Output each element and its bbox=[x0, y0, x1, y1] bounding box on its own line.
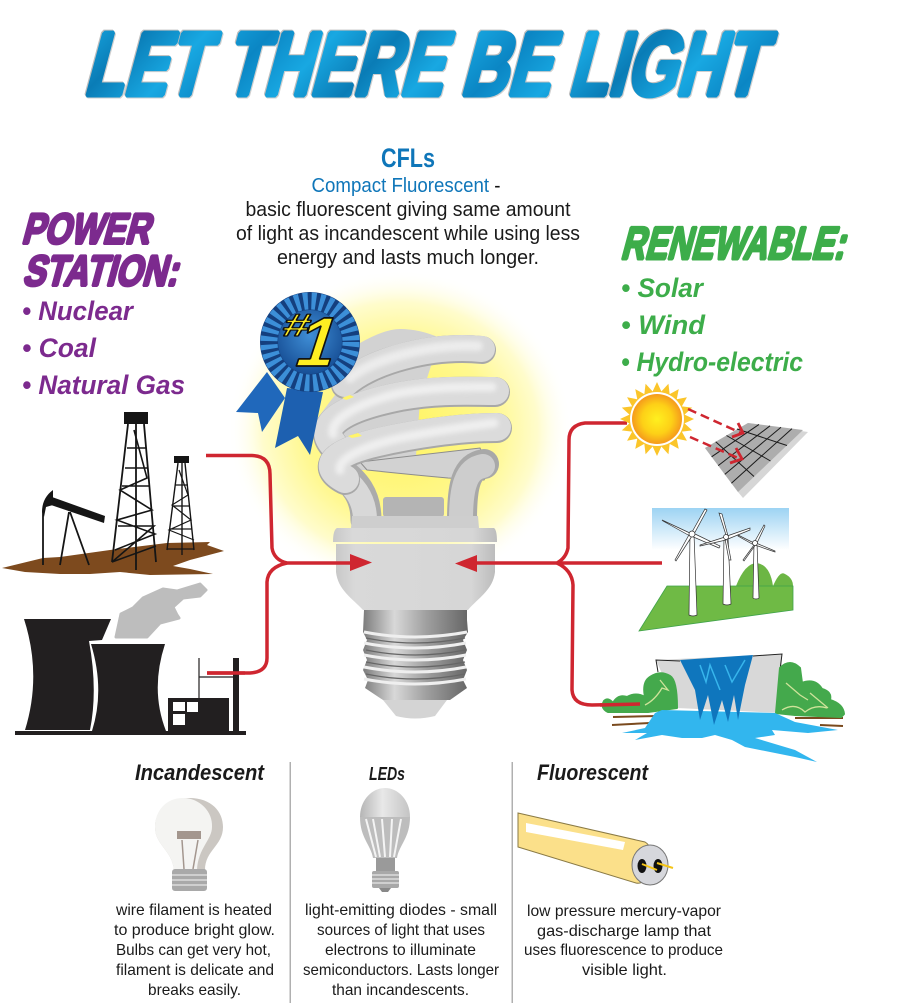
bulb: tip bbox=[383, 700, 447, 718]
icon: fluorescent tube bbox=[518, 813, 673, 885]
bulb: housing bbox=[336, 544, 495, 610]
seal bbox=[278, 310, 342, 374]
description: low pressure mercury-vapor bbox=[527, 903, 722, 920]
cliff edge bbox=[656, 654, 782, 672]
icon: #1 ribbon bbox=[236, 292, 360, 455]
bulb: spiral tube bbox=[328, 346, 497, 480]
sky bbox=[652, 508, 789, 550]
CFLs text line 1: basic fluorescent giving same amount bbox=[246, 199, 571, 221]
description: Bulbs can get very hot, bbox=[116, 942, 271, 959]
tall derrick bbox=[112, 412, 156, 570]
logs bbox=[612, 716, 843, 726]
connector lines: renewable bbox=[477, 423, 662, 705]
bulb glow bbox=[228, 270, 572, 590]
panel dividers bbox=[290, 762, 513, 1003]
heading: Fluorescent bbox=[537, 760, 649, 785]
cooling tower left bbox=[24, 619, 111, 730]
icon: LED bulb bbox=[360, 788, 410, 892]
icon: oil field bbox=[2, 412, 224, 575]
plant ground bbox=[15, 731, 246, 735]
icon: hydro-electric waterfall bbox=[603, 654, 844, 762]
description: breaks easily. bbox=[148, 982, 241, 999]
icon: incandescent bulb bbox=[155, 798, 223, 891]
panel: fluorescent bbox=[518, 760, 723, 979]
bulb: collar bbox=[333, 528, 497, 542]
bushes left bbox=[603, 673, 677, 712]
sun rays to panel bbox=[688, 409, 743, 463]
smoke bbox=[116, 584, 206, 637]
item: wind: • Wind bbox=[621, 310, 706, 340]
bushes right bbox=[776, 663, 844, 717]
connector arrow: left bbox=[350, 554, 372, 571]
description: semiconductors. Lasts longer bbox=[303, 962, 500, 979]
turbines bbox=[662, 509, 775, 616]
bulb: centre tab bbox=[383, 497, 444, 517]
building windows bbox=[173, 702, 198, 725]
ribbon tail right bbox=[275, 388, 323, 455]
sun disc bbox=[630, 392, 684, 446]
rosette bbox=[260, 292, 360, 392]
cliff bbox=[656, 654, 782, 713]
connector arrow: right bbox=[455, 555, 477, 572]
description: wire filament is heated bbox=[115, 902, 272, 919]
power station list bbox=[18, 205, 187, 400]
icon: wind farm bbox=[639, 508, 793, 631]
bulb: back silhouette bbox=[316, 329, 440, 470]
ribbon number: 1 bbox=[287, 304, 350, 382]
bulb: screw base bbox=[363, 610, 468, 700]
item: nuclear: • Nuclear bbox=[22, 296, 134, 326]
panel: incandescent bbox=[114, 760, 275, 999]
connector lines: power station bbox=[206, 456, 352, 673]
plant building bbox=[168, 698, 229, 732]
description: electrons to illuminate bbox=[325, 942, 476, 959]
bulb: small yellow gaps in spiral bbox=[342, 395, 362, 438]
bulb: under tube bbox=[360, 448, 490, 480]
renewable list bbox=[617, 218, 855, 377]
hills bbox=[736, 563, 793, 586]
item: solar: • Solar bbox=[621, 273, 704, 303]
CFLs text line 3: energy and lasts much longer. bbox=[277, 247, 539, 269]
small derrick bbox=[167, 456, 194, 555]
bulb: legs bbox=[338, 464, 484, 520]
pool bbox=[622, 710, 838, 762]
bulb: upper collar bbox=[351, 516, 479, 528]
description: than incandescents. bbox=[332, 982, 469, 999]
CFLs description bbox=[236, 143, 580, 269]
solar panel bbox=[705, 423, 808, 498]
icon: nuclear plant bbox=[15, 584, 246, 735]
description bbox=[303, 902, 500, 999]
panel: LEDs bbox=[303, 764, 500, 999]
cooling tower right bbox=[91, 644, 166, 731]
oil spill bbox=[2, 542, 224, 575]
CFLs subtitle: Compact Fluorescent - bbox=[312, 175, 500, 197]
description: filament is delicate and bbox=[116, 962, 274, 979]
icon: sun and solar panel bbox=[620, 382, 808, 498]
pipe bbox=[199, 658, 234, 698]
description: sources of light that uses bbox=[317, 922, 485, 939]
ribbon hash sign: # bbox=[279, 307, 315, 343]
CFL bulb bbox=[316, 329, 497, 718]
description: uses fluorescence to produce bbox=[524, 942, 723, 959]
item: coal: • Coal bbox=[22, 333, 96, 363]
description: visible light. bbox=[582, 962, 667, 979]
heading: power: POWER bbox=[18, 205, 159, 253]
CFLs heading: CFLs bbox=[381, 143, 435, 173]
chimney bbox=[233, 658, 239, 732]
connector overlay: hydro line bbox=[600, 704, 640, 705]
waterfall bbox=[680, 655, 753, 725]
CFLs text line 2: of light as incandescent while using less bbox=[236, 223, 580, 245]
item: hydro-electric: • Hydro-electric bbox=[621, 347, 803, 377]
description: to produce bright glow. bbox=[114, 922, 275, 939]
ribbon tail left bbox=[236, 372, 285, 432]
description bbox=[524, 903, 723, 979]
description: light-emitting diodes - small bbox=[305, 902, 497, 919]
water strands bbox=[700, 660, 745, 690]
description: gas-discharge lamp that bbox=[537, 923, 712, 940]
heading: Incandescent bbox=[135, 760, 266, 785]
item: natural gas: • Natural Gas bbox=[22, 370, 185, 400]
heading: station: STATION: bbox=[19, 247, 187, 295]
description bbox=[114, 902, 275, 999]
connector overlay: plant line bbox=[207, 671, 245, 675]
vine accents bbox=[645, 680, 828, 712]
pump jack bbox=[42, 490, 105, 565]
sun rays bbox=[620, 382, 694, 456]
field bbox=[639, 586, 793, 631]
heading: LEDs bbox=[369, 764, 405, 784]
